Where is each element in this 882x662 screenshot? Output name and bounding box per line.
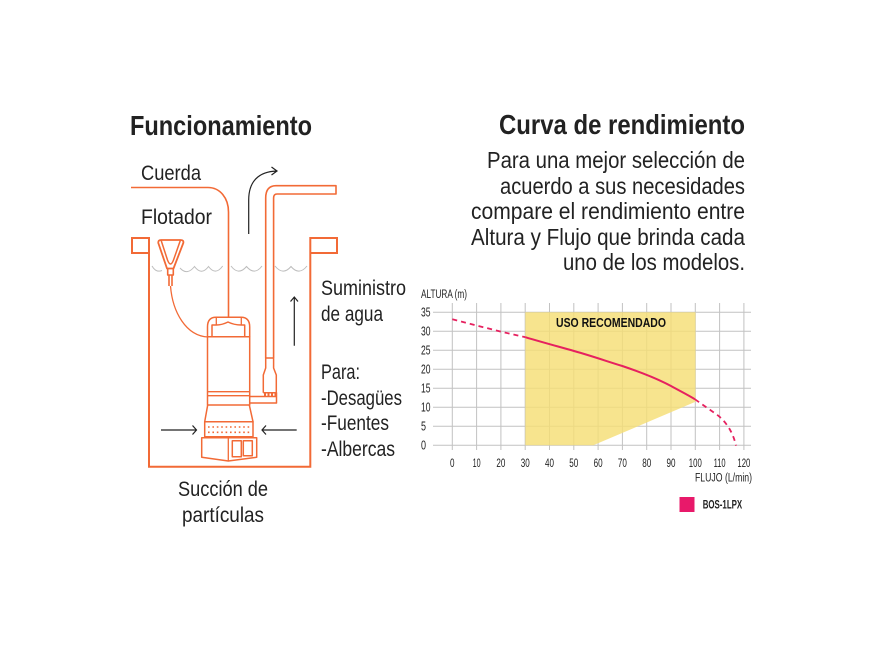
recommended use area bbox=[525, 312, 696, 445]
legend swatch bbox=[680, 497, 694, 512]
y axis labels: 35 bbox=[421, 306, 431, 320]
discharge pipe bbox=[250, 186, 336, 403]
x axis labels: 30 bbox=[521, 456, 530, 470]
label: Succión de partículas: Succión de bbox=[178, 478, 268, 501]
pump bbox=[202, 317, 257, 461]
x axis labels: 90 bbox=[666, 456, 676, 470]
arrow: left suction bbox=[161, 426, 196, 434]
arrow: water supply bbox=[290, 297, 298, 346]
text block: description: uno de los modelos. bbox=[563, 249, 745, 275]
label: uses: -Desagües bbox=[321, 387, 402, 410]
heading: Curva de rendimiento: Curva de rendimiento bbox=[499, 109, 745, 140]
x axis labels: 120 bbox=[737, 456, 751, 470]
x axis labels: 0 bbox=[450, 456, 455, 470]
y axis title: ALTURA (m) bbox=[421, 289, 467, 301]
label: Suministro de agua: Suministro bbox=[321, 277, 406, 300]
y axis labels: 10 bbox=[421, 400, 431, 414]
diagram: pump in tank bbox=[131, 167, 337, 467]
tank bbox=[132, 238, 337, 467]
grid bbox=[433, 303, 751, 450]
y axis labels: 0 bbox=[421, 438, 426, 452]
x axis labels: 40 bbox=[545, 456, 554, 470]
label: uses bbox=[321, 361, 402, 461]
label: recommended use: USO RECOMENDADO bbox=[556, 315, 666, 330]
label: Suministro de agua: de agua bbox=[321, 303, 383, 326]
text block: description: Altura y Flujo que brinda cada bbox=[471, 224, 745, 250]
x axis labels: 70 bbox=[618, 456, 627, 470]
heading: Funcionamiento: Funcionamiento bbox=[130, 110, 312, 141]
float bbox=[158, 240, 208, 337]
legend bbox=[680, 497, 742, 512]
x axis labels: 110 bbox=[714, 456, 726, 470]
x axis title: FLUJO (L/min) bbox=[695, 472, 752, 484]
curve: solid range bbox=[526, 337, 695, 399]
label: uses: -Fuentes bbox=[321, 412, 389, 435]
text block: description: compare el rendimiento entre bbox=[471, 198, 745, 224]
x axis labels: 10 bbox=[473, 456, 481, 470]
label: uses: Para: bbox=[321, 361, 360, 384]
legend label: BOS-1LPX bbox=[703, 500, 742, 512]
y axis labels bbox=[421, 306, 431, 452]
label: Succión de partículas: partículas bbox=[182, 504, 264, 527]
x axis labels: 20 bbox=[496, 456, 506, 470]
label: Succión de partículas bbox=[178, 478, 268, 527]
y axis labels: 20 bbox=[421, 362, 431, 376]
arrow: discharge flow bbox=[249, 167, 277, 234]
text block: description bbox=[471, 147, 745, 275]
x axis labels bbox=[450, 456, 751, 470]
curve: dashed start bbox=[452, 319, 526, 337]
y axis labels: 30 bbox=[421, 324, 431, 338]
y axis labels: 5 bbox=[421, 420, 426, 434]
text block: description: Para una mejor selección de bbox=[487, 147, 745, 173]
intake holes bbox=[208, 427, 250, 432]
text block: description: acuerdo a sus necesidades bbox=[500, 173, 745, 199]
y axis labels: 15 bbox=[421, 382, 431, 396]
x axis labels: 60 bbox=[594, 456, 603, 470]
y axis labels: 25 bbox=[421, 344, 431, 358]
rope bbox=[131, 188, 228, 318]
label: uses: -Albercas bbox=[321, 438, 395, 461]
x axis labels: 100 bbox=[689, 456, 702, 470]
x axis labels: 50 bbox=[569, 456, 579, 470]
x axis labels: 80 bbox=[642, 456, 651, 470]
label: Flotador: Flotador bbox=[141, 206, 212, 229]
arrow: right suction bbox=[262, 426, 297, 434]
label: Cuerda: Cuerda bbox=[141, 162, 201, 185]
label: Suministro de agua bbox=[321, 277, 406, 326]
chart: performance curve bbox=[421, 289, 752, 512]
water surface bbox=[152, 266, 307, 272]
curve: dashed end bbox=[695, 399, 736, 446]
